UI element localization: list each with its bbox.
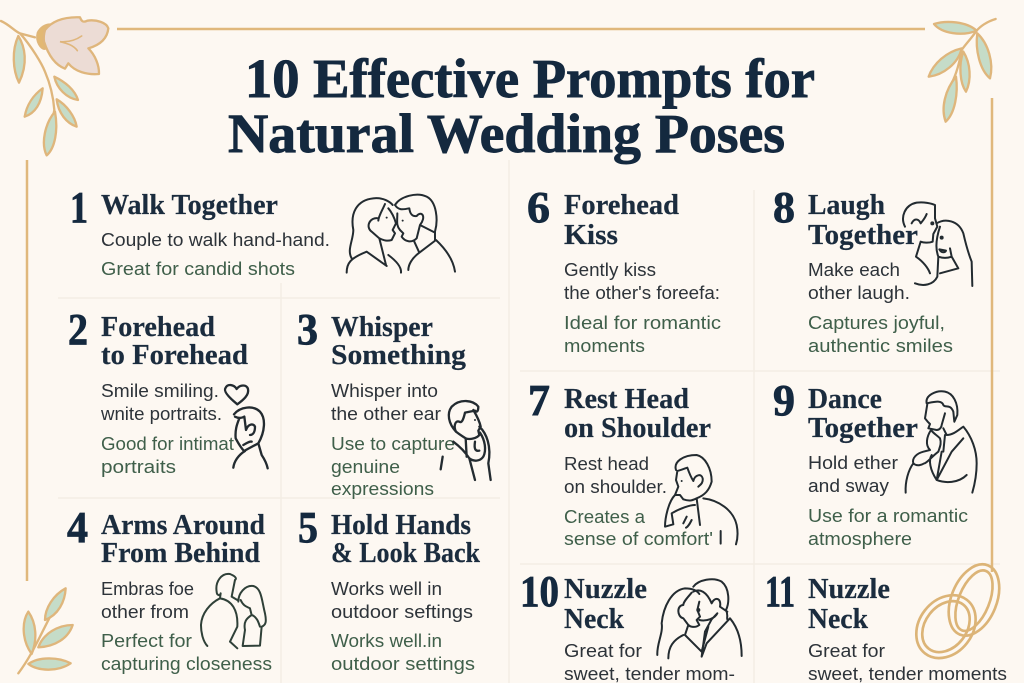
panel: 5 Hold Hands and Look Back: Works well in — [331, 578, 442, 599]
panel: 1 Walk Together: Couple to walk hand-hand. — [101, 229, 330, 250]
icon: heart and man — [225, 385, 268, 468]
panel: 6 Forehead Kiss: Ideal for romantic — [564, 312, 721, 333]
panel: 8 Laugh Together: Captures joyful, — [808, 312, 945, 333]
panel: 11 Nuzzle Neck: Nuzzle — [808, 574, 890, 605]
panel: 7 Rest Head on Shoulder — [528, 376, 738, 549]
decorative gold frame — [27, 29, 992, 581]
panel: 2 Forehead to Forehead: Smile smiling. — [101, 380, 219, 401]
icon: flower sprig top left — [1, 17, 108, 155]
panel: 7 Rest Head on Shoulder: Creates a — [564, 506, 646, 527]
panel: 8 Laugh Together — [773, 183, 972, 356]
panel: 5 Hold Hands and Look Back: & Look Back — [331, 538, 480, 569]
panel: 9 Dance Together: Together — [808, 413, 918, 444]
panel: 6 Forehead Kiss: moments — [564, 335, 645, 356]
panel: 9 Dance Together: Hold ether — [808, 452, 898, 473]
icon: man dancing — [906, 391, 977, 493]
panel: 8 Laugh Together: Make each — [808, 259, 900, 280]
panel: 3 Whisper Something: Whisper — [331, 312, 433, 343]
panel: 10 Nuzzle Neck: Great for — [564, 640, 642, 661]
icon: leaf sprig top right — [929, 19, 996, 122]
panel: 11 Nuzzle Neck: 11 — [765, 567, 795, 616]
panel: 8 Laugh Together: Together — [808, 220, 918, 251]
panel: 5 Hold Hands and Look Back: 5 — [298, 503, 318, 552]
panel: 9 Dance Together: Dance — [808, 384, 882, 415]
panel: 7 Rest Head on Shoulder: on Shoulder — [564, 413, 711, 444]
panel: 10 Nuzzle Neck: 10 — [520, 567, 559, 616]
panel: 4 Arms Around From Behind: capturing closeness — [101, 653, 272, 674]
panel: 11 Nuzzle Neck: Great for — [808, 640, 885, 661]
panel: 3 Whisper Something: Whisper into — [331, 380, 438, 401]
panel: 7 Rest Head on Shoulder: on shoulder. — [564, 476, 667, 497]
icon: man whispering — [441, 401, 491, 480]
panel: 10 Nuzzle Neck: Nuzzle — [564, 574, 647, 605]
panel: 6 Forehead Kiss: Gently kiss — [564, 259, 656, 280]
panel: 1 Walk Together: 1 — [70, 183, 88, 232]
panel: 8 Laugh Together: Laugh — [808, 190, 885, 221]
panel: 2 Forehead to Forehead: Forehead — [101, 312, 215, 343]
title: 10 Effective Prompts for — [245, 48, 815, 109]
panel: 2 Forehead to Forehead: to Forehead — [101, 340, 248, 371]
panel: 2 Forehead to Forehead — [68, 305, 268, 477]
panel: 7 Rest Head on Shoulder: sense of comfort' — [564, 528, 713, 549]
panel: 3 Whisper Something: the other ear — [331, 403, 441, 424]
panel: 6 Forehead Kiss: the other's foreefa: — [564, 282, 720, 303]
panel: 6 Forehead Kiss: 6 — [527, 183, 550, 232]
title: Natural Wedding Poses — [228, 103, 785, 164]
panel: 5 Hold Hands and Look Back: outdoor seftings — [331, 601, 473, 622]
icon: man and woman from behind — [201, 574, 266, 648]
icon: head on shoulder — [665, 455, 738, 544]
panel: 3 Whisper Something: 3 — [297, 305, 318, 354]
panel: 7 Rest Head on Shoulder: 7 — [528, 376, 550, 425]
panel: 3 Whisper Something — [297, 305, 491, 499]
panel: 4 Arms Around From Behind — [67, 503, 272, 674]
panel: 11 Nuzzle Neck — [765, 557, 1009, 683]
icon: nuzzling couple — [657, 579, 742, 658]
panel: 6 Forehead Kiss — [527, 183, 721, 356]
panel: 4 Arms Around From Behind: Arms Around — [101, 510, 265, 541]
panel: 4 Arms Around From Behind: Perfect for — [101, 630, 192, 651]
panel: 1 Walk Together: Great for candid shots — [101, 258, 295, 279]
panel: 2 Forehead to Forehead: Good for intimat — [101, 433, 235, 454]
panel: 7 Rest Head on Shoulder: Rest head — [564, 453, 649, 474]
panel: 5 Hold Hands and Look Back — [298, 503, 480, 674]
panel: 9 Dance Together — [773, 376, 977, 549]
title — [228, 48, 815, 164]
panel: 2 Forehead to Forehead: 2 — [68, 305, 88, 354]
panel: 4 Arms Around From Behind: From Behind — [101, 538, 260, 569]
panel: 3 Whisper Something: genuine — [331, 456, 400, 477]
icon: laughing couple — [903, 202, 972, 286]
panel: 4 Arms Around From Behind: Embras foe — [101, 578, 194, 599]
icon: leaf sprig bottom left — [18, 588, 73, 673]
panel: 8 Laugh Together: authentic smiles — [808, 335, 953, 356]
panel: 4 Arms Around From Behind: 4 — [67, 503, 88, 552]
panel: 3 Whisper Something: Use to capture — [331, 433, 455, 454]
panel: 1 Walk Together — [70, 183, 455, 279]
icon: couple face to face — [347, 195, 455, 273]
panel: 7 Rest Head on Shoulder: Rest Head — [564, 384, 689, 415]
panel: 6 Forehead Kiss: Kiss — [564, 220, 618, 251]
panel: 5 Hold Hands and Look Back: Works well.in — [331, 630, 442, 651]
panel: 10 Nuzzle Neck: Neck — [564, 604, 624, 635]
panel: 9 Dance Together: Use for a romantic — [808, 505, 968, 526]
panel: 9 Dance Together: atmosphere — [808, 528, 912, 549]
panel: 1 Walk Together: Walk Together — [101, 190, 278, 221]
panel: 4 Arms Around From Behind: other from — [101, 601, 189, 622]
panel: 3 Whisper Something: Something — [331, 340, 466, 371]
panel: 5 Hold Hands and Look Back: Hold Hands — [331, 510, 471, 541]
panel: 3 Whisper Something: expressions — [331, 478, 434, 499]
icon: wedding rings — [904, 557, 1009, 670]
panel: 2 Forehead to Forehead: wnite portraits. — [100, 403, 222, 424]
panel: 9 Dance Together: 9 — [773, 376, 795, 425]
panel: 9 Dance Together: and sway — [808, 475, 890, 496]
panel: 10 Nuzzle Neck — [520, 567, 742, 683]
panel: 8 Laugh Together: 8 — [773, 183, 795, 232]
panel: 11 Nuzzle Neck: Neck — [808, 604, 868, 635]
panel: 6 Forehead Kiss: Forehead — [564, 190, 679, 221]
panel: 5 Hold Hands and Look Back: outdoor settings — [331, 653, 475, 674]
panel: 8 Laugh Together: other laugh. — [808, 282, 910, 303]
panel: 2 Forehead to Forehead: portraits — [101, 456, 176, 477]
